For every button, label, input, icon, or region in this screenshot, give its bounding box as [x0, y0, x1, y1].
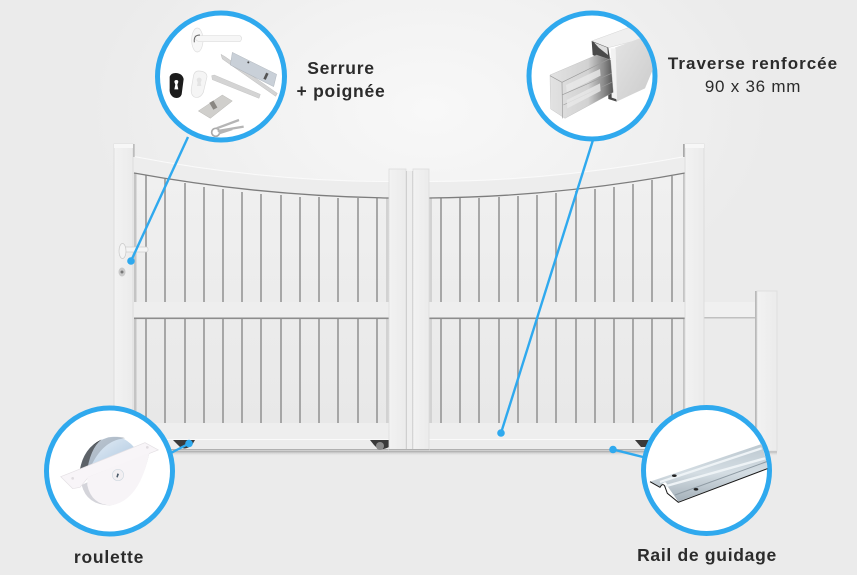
- left leaf slats: [146, 175, 377, 423]
- label: roller: roulette: [74, 547, 144, 567]
- icon: lock kit: [170, 28, 277, 136]
- icon: aluminium profile: [550, 28, 653, 118]
- right leaf infill: [429, 173, 685, 425]
- connector: roller: [171, 440, 193, 453]
- circle frame: [46, 408, 172, 534]
- icon: roller wheel: [61, 437, 158, 505]
- right middle rail: [429, 302, 685, 318]
- label: lock and handle: Serrure: [307, 58, 375, 78]
- right leaf: [429, 156, 685, 450]
- left leaf: [134, 156, 389, 450]
- rollers: [173, 440, 650, 450]
- circle frame: [158, 13, 284, 140]
- connector: crossbar: [497, 140, 593, 437]
- callout: roller: [46, 408, 172, 534]
- left middle rail: [134, 302, 389, 318]
- callout: guide rail: [644, 408, 770, 534]
- callout: crossbar profile: [529, 13, 655, 139]
- label: lock and handle line 2: + poignée: [297, 81, 385, 101]
- door handle and lock: [118, 244, 148, 276]
- circle frame: [529, 13, 655, 139]
- left leaf infill: [134, 173, 389, 425]
- callout: lock and handle: [158, 13, 284, 140]
- left bottom rail: [134, 423, 389, 439]
- side fence panel: [704, 291, 777, 451]
- label: crossbar size: 90 x 36 mm: [705, 77, 801, 96]
- label: crossbar: Traverse renforcée: [668, 54, 838, 73]
- centre posts: [389, 169, 429, 450]
- right leaf slats: [441, 176, 672, 423]
- ground shadow: [114, 451, 777, 456]
- left curved top rail: [134, 157, 389, 198]
- right gate post: [683, 144, 704, 450]
- left gate post: [114, 144, 134, 450]
- connector: guide rail: [609, 446, 643, 457]
- icon: metal rail: [650, 444, 768, 502]
- circle frame: [644, 408, 770, 534]
- right curved top rail: [429, 157, 685, 198]
- connector: lock: [127, 137, 188, 265]
- label: guide rail: Rail de guidage: [637, 545, 777, 565]
- right bottom rail: [429, 423, 685, 439]
- gate assembly: [114, 144, 777, 456]
